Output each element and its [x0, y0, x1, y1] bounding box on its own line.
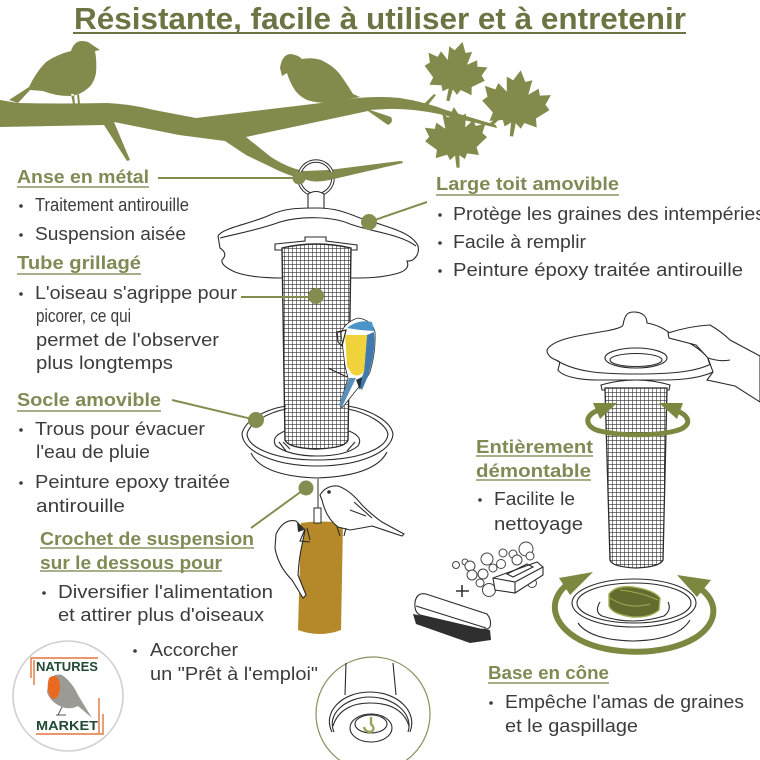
fat cylinder with two birds [275, 486, 404, 634]
bird right [320, 486, 404, 536]
label: tube grillagé: plus longtemps [36, 353, 173, 373]
rotation arrow top [588, 403, 688, 435]
logo: natures market: NATURES [36, 660, 98, 674]
hook wire [317, 479, 319, 510]
label: anse en métal: Traitement antirouille [35, 195, 189, 215]
label: socle amovible: Socle amovible [17, 389, 161, 410]
label: crochet de suspension: Diversifier l'alimentation [58, 582, 273, 602]
rotation arrow bottom [555, 572, 713, 652]
label: socle amovible: Peinture epoxy traitée [35, 472, 230, 492]
label: tube grillagé: L'oiseau s'agrippe pour [35, 283, 237, 303]
label: socle amovible [17, 389, 230, 516]
label: base en cône: Base en cône [488, 662, 609, 683]
bird silhouette right [280, 54, 360, 103]
label: entièrement démontable: nettoyage [494, 514, 583, 534]
hanging tag [314, 508, 321, 523]
label: anse en métal [17, 166, 189, 244]
roof [218, 208, 418, 278]
label: tube grillagé: permet de l'observer [36, 330, 219, 350]
leader lines and dots [158, 172, 427, 528]
label: entièrement démontable: Facilite le [494, 489, 575, 509]
label: crochet de suspension: et attirer plus d'oiseaux [58, 605, 264, 625]
hook [364, 717, 374, 732]
bird silhouette left [9, 41, 100, 104]
label: tube grillagé [17, 252, 237, 373]
label: large toit amovible: Peinture époxy traitée antirouille [453, 260, 743, 280]
label: anse en métal: Anse en métal [17, 166, 149, 187]
robin [47, 675, 92, 718]
label: base en cône: Empêche l'amas de graines [505, 692, 744, 712]
label: entièrement démontable [476, 436, 593, 534]
label: socle amovible: Trous pour évacuer [35, 419, 205, 439]
tube rim [275, 237, 357, 250]
roof opening [605, 348, 667, 368]
logo: natures market: MARKET [36, 719, 98, 733]
label: crochet de suspension: Crochet de suspension [40, 528, 254, 549]
soap [493, 562, 543, 593]
branch [0, 97, 497, 182]
hand [668, 325, 760, 402]
handle ring [299, 161, 403, 208]
label: crochet de suspension [40, 528, 318, 684]
label: large toit amovible [436, 173, 760, 280]
label: large toit amovible: Large toit amovible [436, 173, 619, 194]
label: tube grillagé: picorer, ce qui [36, 306, 131, 326]
base tray [242, 406, 393, 478]
lifted roof [547, 312, 713, 380]
soap and brush [413, 542, 543, 643]
label: large toit amovible: Facile à remplir [453, 232, 586, 252]
bubbles [452, 542, 536, 596]
tube rim [601, 380, 670, 390]
base tray [578, 620, 690, 641]
hanging feeder [218, 161, 418, 510]
label: base en cône [488, 662, 744, 736]
label: socle amovible: l'eau de pluie [36, 442, 150, 462]
label: entièrement démontable: Entièrement [476, 436, 593, 457]
seed cone [609, 587, 660, 617]
exploded feeder [547, 312, 760, 652]
label: crochet de suspension: un "Prêt à l'emploi" [150, 664, 318, 684]
label: large toit amovible: Protège les graines des intempéries [453, 204, 760, 224]
mesh tube [282, 244, 351, 449]
logo: natures market [13, 641, 123, 751]
label: anse en métal: Suspension aisée [35, 224, 186, 244]
branch with birds and leaves [0, 34, 554, 182]
mesh tube [605, 388, 667, 568]
plus sign [456, 585, 469, 597]
label: crochet de suspension: Accorcher [150, 640, 238, 660]
maple leaves [418, 34, 493, 108]
blue tit on tube [328, 318, 375, 408]
underside detail circle [316, 657, 430, 760]
bird left [275, 521, 310, 598]
brush [413, 614, 491, 643]
label: crochet de suspension: sur le dessous pour [40, 552, 222, 573]
label: entièrement démontable: démontable [476, 460, 591, 481]
title: Résistante, facile à utiliser et à entretenir [74, 1, 686, 36]
label: socle amovible: antirouille [36, 496, 125, 516]
label: tube grillagé: Tube grillagé [17, 252, 141, 273]
fat cylinder [298, 522, 343, 634]
label: base en cône: et le gaspillage [505, 716, 638, 736]
